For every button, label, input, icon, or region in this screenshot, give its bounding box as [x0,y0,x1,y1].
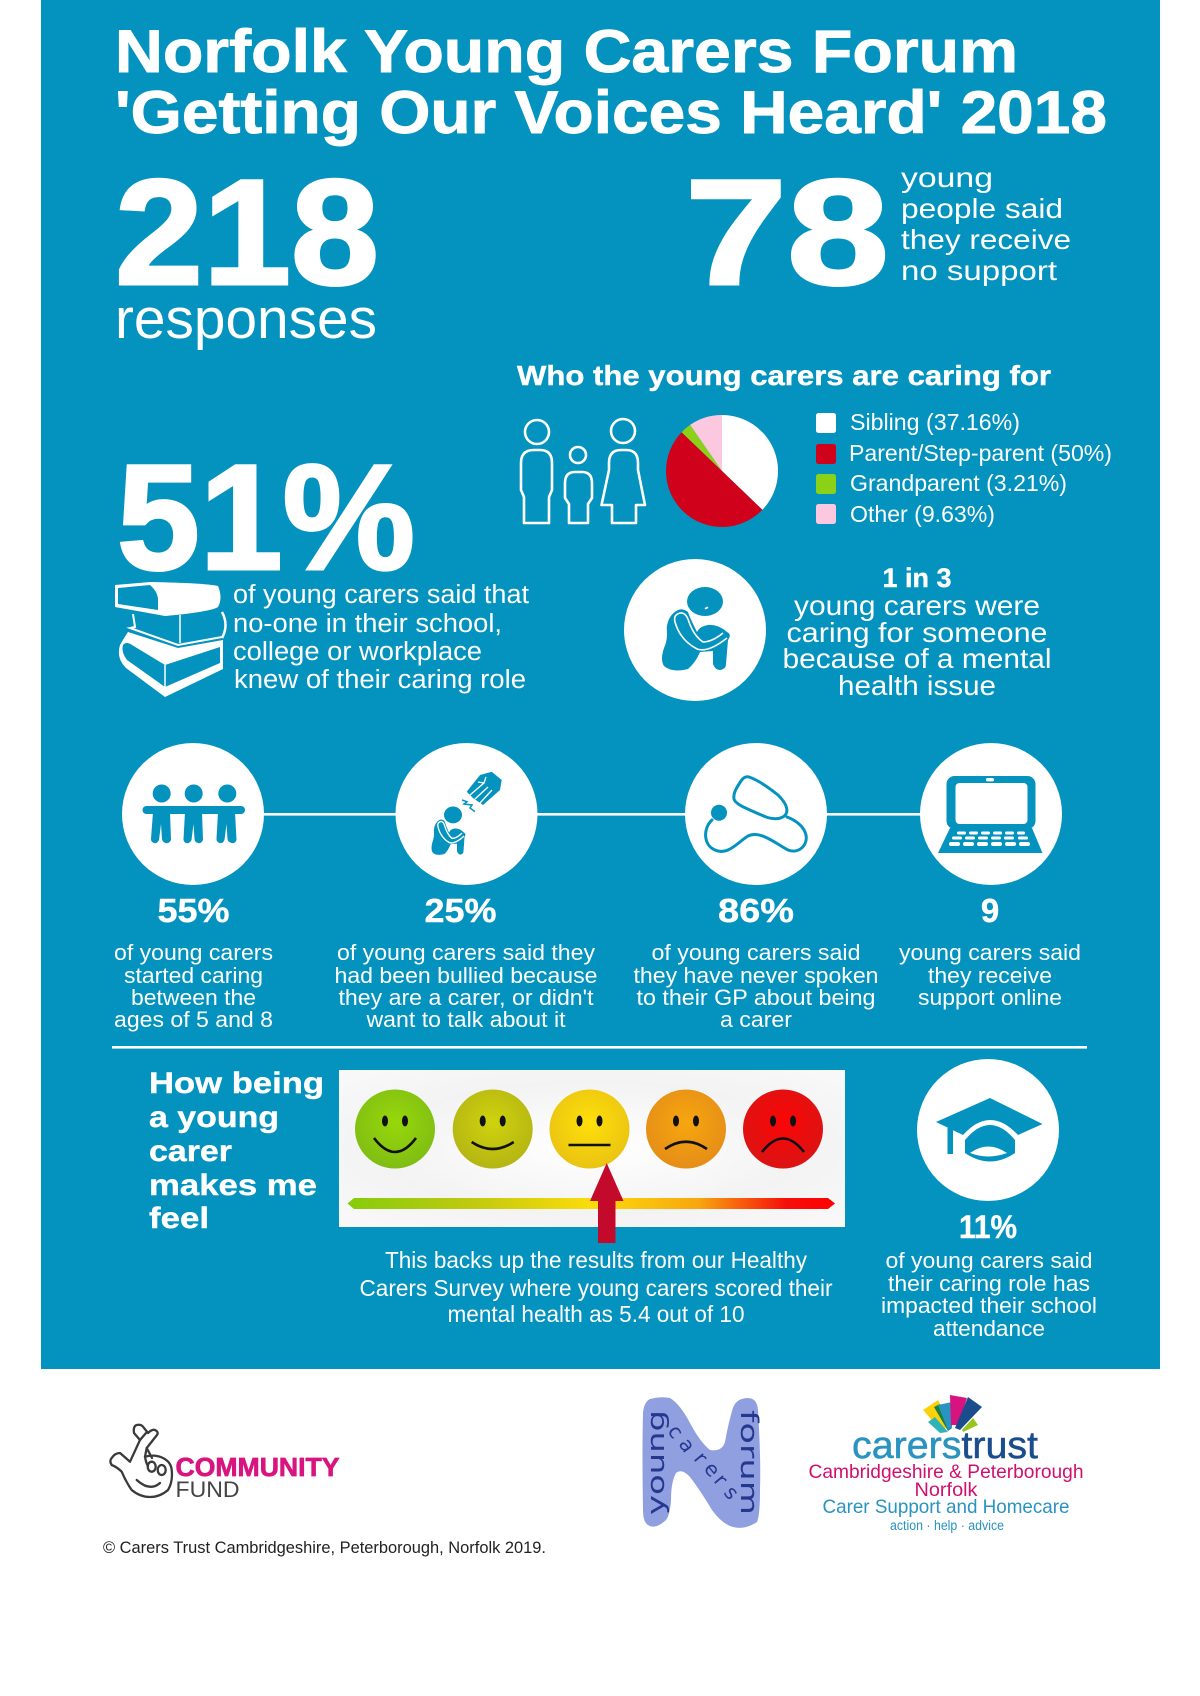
legend: Sibling (37.16%) [850,409,1020,435]
text: 55% description: between the [131,985,256,1010]
text: healthy carers survey note [360,1247,833,1327]
text: 55% description [114,940,273,1032]
stat: 218 responses: 218 [115,148,379,316]
title [115,18,1107,146]
figure: 86%: 86% [718,892,794,929]
logo: carers trust [808,1395,1084,1533]
wordmark: carerstrust: carerstrust [852,1425,1038,1467]
face: neutral [550,1090,630,1168]
icon: stethoscope [706,777,806,851]
text: 55% description: of young carers [114,940,273,965]
pie chart: who is cared for [666,415,778,527]
text: healthy carers survey note: This backs up the results from our Healthy [385,1247,807,1273]
text: 51 percent description: college or workplace [233,638,482,666]
figure: 11%: 11% [959,1209,1017,1245]
legend: Parent/Step-parent (50%) [849,440,1112,466]
text: region names: action · help · advice [890,1518,1004,1533]
text: 51 percent description: no-one in their school, [233,610,502,638]
text: 1 in 3 mental health [782,563,1052,701]
text: 11% description: attendance [933,1316,1045,1341]
text: 55% description: ages of 5 and 8 [114,1007,273,1032]
heading: how being a young carer makes me feel: carer [149,1135,232,1168]
legend: Other (9.63%) [850,501,995,527]
text: 9 description: they receive [928,963,1052,988]
panel: feelings scale [339,1070,845,1227]
text: copyright: © Carers Trust Cambridgeshire, Peterborough, Norfolk 2019. [103,1538,546,1557]
logo: young carers forum: s [719,1481,744,1504]
panel: 86 percent GP [634,743,878,1032]
logo: young carers forum: forum [735,1410,763,1515]
text: healthy carers survey note: Carers Survey where young carers scored their [360,1275,833,1301]
text: region names: Norfolk [914,1479,978,1501]
icon: stack of books [115,582,226,697]
icon: fist and crouching person [432,772,502,855]
stat: 78 young people no support: people said [901,193,1063,224]
legend: Grandparent (3.21%) [850,470,1067,496]
icon: crossed fingers hand [110,1425,172,1497]
heading: how being a young carer makes me feel: feel [149,1202,209,1235]
logo: young carers forum: r [689,1447,713,1469]
heading: how being a young carer makes me feel: a young [149,1101,279,1134]
text: 86% description [634,940,878,1032]
text: region names [808,1461,1084,1533]
text: 1 in 3 mental health: 1 in 3 [882,563,952,593]
figure: 55%: 55% [158,892,230,929]
stat: 78 young people no support: 78 [685,148,889,316]
logo: young carers forum: e [699,1457,725,1482]
icon: three people holding hands [142,784,245,843]
logo: community fund [110,1425,339,1502]
logo: young carers forum: a [674,1433,701,1457]
text: 9 description: young carers said [899,940,1081,965]
title: Norfolk Young Carers Forum [115,18,1018,85]
text: 11% description: their caring role has [888,1271,1090,1296]
text: 51 percent description: knew of their caring role [234,666,526,694]
text: 25% description [334,940,598,1032]
text: 1 in 3 mental health: young carers were [794,590,1040,621]
heading: how being a young carer makes me feel [149,1067,324,1235]
title: 'Getting Our Voices Heard' 2018 [115,79,1107,146]
text: 25% description: they are a carer, or didn't [338,985,594,1010]
stat: 78 young people no support: young [901,162,993,193]
face: happy [453,1090,533,1168]
text: 25% description: of young carers said they [337,940,596,965]
wordmark: fund: FUND [176,1477,240,1502]
figure: 25%: 25% [424,892,496,929]
text: region names: Cambridgeshire & Peterborough [808,1461,1084,1483]
wordmark: community: COMMUNITY [176,1452,340,1482]
icon: family outlines [521,419,645,523]
icon: laptop [938,776,1042,853]
text: 11% description: impacted their school [881,1293,1097,1318]
text: 1 in 3 mental health: health issue [838,670,996,701]
icon: graduation cap [936,1098,1042,1162]
text: 1 in 3 mental health: because of a mental [782,643,1052,674]
stat: 78 young people no support [685,148,1071,316]
text: 86% description: a carer [720,1007,793,1032]
text: 25% description: had been bullied because [334,963,598,988]
text: 1 in 3 mental health: caring for someone [786,617,1048,648]
text: 9 description [899,940,1081,1010]
arrow: red pointer [590,1163,624,1243]
text: region names: Carer Support and Homecare [822,1496,1070,1518]
panel: 11 percent school attendance [881,1059,1097,1341]
text: 11% description [881,1248,1097,1341]
stat: 78 young people no support: no support [901,255,1057,286]
logo: young carers forum: c [663,1420,689,1443]
logo: young carers forum: young [642,1410,670,1515]
face: very happy [355,1090,435,1168]
panel: 55 percent started caring [114,743,273,1032]
gradient scale bar [348,1198,835,1209]
figure: 9: 9 [981,892,999,929]
panel: blue background [41,0,1160,1369]
logo: young carers forum [642,1397,763,1528]
heading: how being a young carer makes me feel: How being [149,1067,324,1100]
text: 9 description: support online [918,985,1062,1010]
stat: 218 responses: responses [115,287,377,351]
panel: 25 percent bullied [334,743,598,1032]
text: 25% description: want to talk about it [365,1007,566,1032]
text: healthy carers survey note: mental health as 5.4 out of 10 [448,1301,744,1327]
stat: 51 percent: 51% [117,433,415,601]
text: 86% description: of young carers said [652,940,860,965]
heading: who the young carers are caring for: Who the young carers are caring for [517,360,1051,391]
text: 51 percent description: of young carers said that [233,581,529,609]
text: 51 percent description [233,581,529,694]
text: 86% description: they have never spoken [634,963,878,988]
logo: young carers forum: r [709,1469,733,1491]
icon: colour fan [923,1395,982,1433]
face: sad [646,1090,726,1168]
legend [816,409,1112,527]
heading: how being a young carer makes me feel: makes me [149,1169,317,1202]
icon: person in white circle [624,559,766,701]
panel: 9 support online [899,743,1081,1010]
stat: 78 young people no support: they receive [901,224,1071,255]
text: 11% description: of young carers said [886,1248,1092,1273]
face: very sad [743,1090,823,1168]
text: 55% description: started caring [124,963,263,988]
text: 86% description: to their GP about being [636,985,876,1010]
